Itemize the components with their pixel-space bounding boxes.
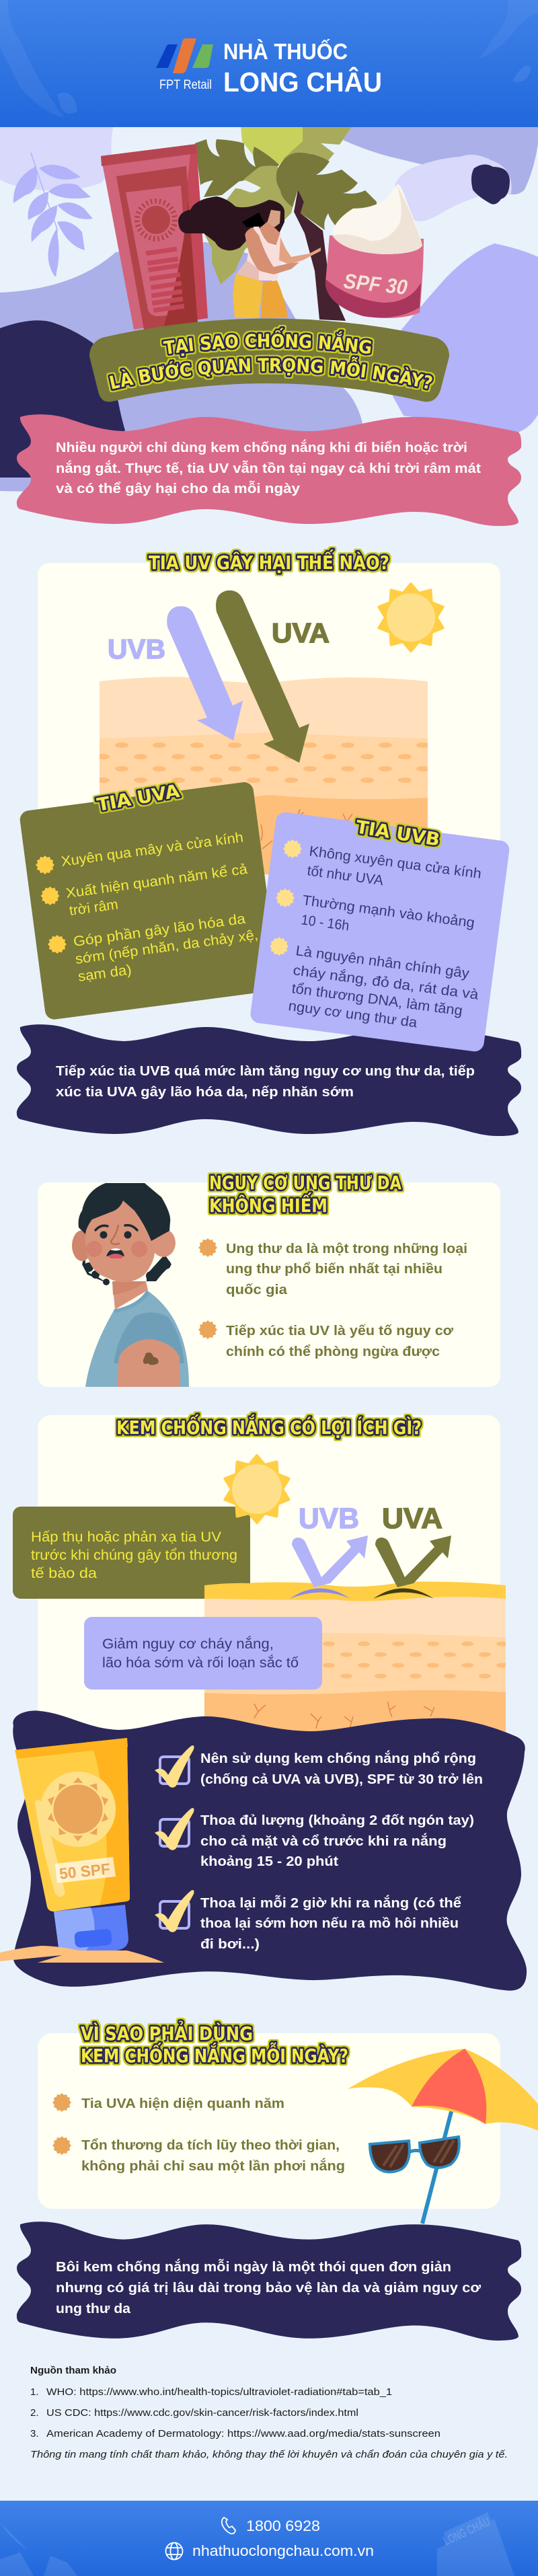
palm tree xyxy=(195,127,377,321)
footer band xyxy=(0,2501,538,2576)
navy blob: tips xyxy=(0,1710,527,1991)
pink intro banner: và có thể gây hại cho da mỗi ngày xyxy=(56,480,301,496)
references: Thông tin mang tính chất tham khảo, không thay thế lời khuyên và chẩn đoán của chuyên gia y tế. xyxy=(30,2449,508,2460)
checks xyxy=(155,1745,194,1932)
card: TIA UVB xyxy=(249,811,510,1053)
website: nhathuoclongchau.com.vn xyxy=(192,2542,374,2559)
bullets: risk: Tiếp xúc tia UV là yếu tố nguy cơ xyxy=(226,1324,454,1338)
skin layers xyxy=(96,677,430,874)
sunglasses xyxy=(370,2137,459,2172)
man illustration xyxy=(72,1183,189,1387)
tips text: khoảng 15 - 20 phút xyxy=(200,1854,338,1869)
leaf sprig xyxy=(13,153,93,277)
references: WHO: https://www.who.int/health-topics/ultraviolet-radiation#tab=tab_1 xyxy=(46,2386,392,2398)
UVA reflect: UVA xyxy=(382,1503,443,1535)
references: US CDC: https://www.cdc.gov/skin-cancer/risk-factors/index.html xyxy=(46,2407,358,2419)
label UVB: UVB xyxy=(108,634,165,665)
navy banner: UVB UVA: Tiếp xúc tia UVB quá mức làm tăng nguy cơ ung thư da, tiếp xyxy=(56,1064,475,1079)
UVB reflect: UVB xyxy=(299,1503,359,1535)
references: 2. xyxy=(30,2407,39,2419)
text: KHÔNG HIẾM xyxy=(209,1192,328,1217)
tips text: đi bơi...) xyxy=(200,1937,260,1952)
panel: why daily: Tổn thương da tích lũy theo thời gian, xyxy=(81,2138,340,2153)
card: TIA UVB: tổn thương DNA, làm tăng xyxy=(291,981,463,1019)
navy conclusion banner: nhưng có giá trị lâu dài trong bảo vệ làn da và giảm nguy cơ xyxy=(56,2281,482,2296)
heading: NGUY CƠ UNG THƯ DA xyxy=(209,1172,401,1194)
logo: LONG CHÂU xyxy=(223,67,382,98)
navy conclusion banner xyxy=(17,2222,521,2341)
panel: benefits xyxy=(38,1415,508,1749)
footer band: LONG CHÂU xyxy=(441,2514,492,2549)
panel: why daily xyxy=(38,2033,500,2209)
panel: why daily: không phải chỉ sau một lần phơi nắng xyxy=(81,2158,345,2174)
card: TIA UVB: Là nguyên nhân chính gây xyxy=(295,943,471,981)
UVB reflect xyxy=(290,1503,368,1599)
skin layers xyxy=(204,1582,506,1733)
pink intro banner xyxy=(17,414,521,526)
logo xyxy=(156,38,382,98)
tips text: Thoa lại mỗi 2 giờ khi ra nắng (có thể xyxy=(200,1895,461,1911)
heading: benefits: KEM CHỐNG NẮNG CÓ LỢI ÍCH GÌ? xyxy=(116,1413,422,1439)
card: TIA UVB: tốt như UVA xyxy=(306,863,384,888)
woman with long hair xyxy=(178,196,321,318)
phone number: 1800 6928 xyxy=(246,2517,320,2534)
olive box: trước khi chúng gây tổn thương xyxy=(31,1548,237,1563)
hero illustration xyxy=(0,127,538,492)
heading: why daily: KEM CHỐNG NẮNG MỖI NGÀY? xyxy=(81,2041,348,2067)
heading: why daily: VÌ SAO PHẢI DÙNG xyxy=(81,2020,253,2045)
UVA arrow xyxy=(216,591,309,763)
umbrella xyxy=(348,2049,538,2224)
references xyxy=(30,2365,508,2460)
lavender box xyxy=(84,1617,322,1690)
panel: UV harm xyxy=(38,563,500,874)
olive box: Hấp thụ hoặc phản xạ tia UV xyxy=(31,1529,221,1545)
hero illustration: LÀ BƯỚC QUAN TRỌNG MỖI NGÀY? xyxy=(106,354,436,393)
bullets: risk: chính có thể phòng ngừa được xyxy=(226,1344,440,1359)
references: 1. xyxy=(30,2386,39,2398)
phone icon xyxy=(222,2517,235,2534)
SPF 30 cream jar: SPF 30 xyxy=(342,269,408,299)
tips text: thoa lại sớm hơn nếu ra mồ hôi nhiều xyxy=(200,1916,459,1931)
header band xyxy=(0,0,538,127)
tube yellow: 50 SPF xyxy=(59,1860,111,1883)
references: 3. xyxy=(30,2428,39,2439)
navy banner: UVB UVA: xúc tia UVA gây lão hóa da, nếp nhăn sớm xyxy=(56,1085,354,1100)
card: TIA UVB: Không xuyên qua cửa kính xyxy=(308,843,482,882)
heading: why daily xyxy=(81,2020,348,2067)
panel: why daily: Tia UVA hiện diện quanh năm xyxy=(81,2096,284,2111)
sun xyxy=(379,584,443,651)
tips text xyxy=(200,1750,483,1952)
card: TIA UVB: cháy nắng, đỏ da, rát da và xyxy=(292,962,479,1003)
card: TIA UVA: sớm (nếp nhăn, da chảy xệ, xyxy=(75,927,259,967)
card: TIA UVA: sạm da) xyxy=(77,962,132,985)
references: American Academy of Dermatology: https://www.aad.org/media/stats-sunscreen xyxy=(46,2428,440,2439)
UVA reflect xyxy=(373,1503,451,1599)
pink intro banner: Nhiều người chỉ dùng kem chống nắng khi đi biển hoặc trời xyxy=(56,439,467,455)
pink intro banner: nắng gắt. Thực tế, tia UV vẫn tồn tại ngay cả khi trời râm mát xyxy=(56,460,481,476)
navy conclusion banner: Bôi kem chống nắng mỗi ngày là một thói quen đơn giản xyxy=(56,2259,451,2275)
navy conclusion banner: ung thư da xyxy=(56,2302,131,2316)
bullets: risk: Ung thư da là một trong những loại xyxy=(226,1242,467,1256)
card: TIA UVB: nguy cơ ung thư da xyxy=(287,998,418,1031)
logo: FPT Retail xyxy=(159,78,212,92)
card: TIA UVB: TIA UVB xyxy=(354,817,441,851)
tips text: Thoa đủ lượng (khoảng 2 đốt ngón tay) xyxy=(200,1813,474,1828)
SPF 30 cream jar xyxy=(325,184,424,318)
navy banner: UVB UVA xyxy=(17,1024,521,1136)
bullets: risk: quốc gia xyxy=(226,1283,288,1297)
sun xyxy=(225,1455,289,1523)
lavender box: lão hóa sớm và rối loạn sắc tố xyxy=(102,1655,299,1671)
globe icon xyxy=(165,2542,183,2560)
UVB arrow xyxy=(167,606,243,741)
card: TIA UVB: Thường mạnh vào khoảng xyxy=(301,893,475,931)
references: Nguồn tham khảo xyxy=(30,2365,116,2376)
label UVA: UVA xyxy=(272,617,330,648)
card: TIA UVA: Xuất hiện quanh năm kể cả xyxy=(65,862,249,901)
title ribbon xyxy=(89,319,449,402)
title text: TẠI SAO CHỐNG NẮNG xyxy=(160,325,374,359)
card: TIA UVA: Góp phần gây lão hóa da xyxy=(73,911,247,950)
tips text: cho cả mặt và cổ trước khi ra nắng xyxy=(200,1833,447,1849)
olive box xyxy=(13,1507,250,1599)
tube yellow xyxy=(15,1738,130,1954)
tips text: Nên sử dụng kem chống nắng phổ rộng xyxy=(200,1750,476,1766)
tips text: (chống cả UVA và UVB), SPF từ 30 trở lên xyxy=(200,1772,483,1787)
card: TIA UVA: Xuyên qua mây và cửa kính xyxy=(61,830,244,870)
card: TIA UVA: trời râm xyxy=(69,897,119,919)
card: TIA UVA xyxy=(19,781,280,1020)
lavender box: Giảm nguy cơ cháy nắng, xyxy=(102,1636,274,1652)
bullets: risk: ung thư phổ biến nhất tại nhiều xyxy=(226,1262,443,1277)
panel: skin cancer risk xyxy=(38,1172,500,1387)
sand xyxy=(0,1946,164,1963)
card: TIA UVB: 10 - 16h xyxy=(300,912,350,934)
olive box: tế bào da xyxy=(31,1566,97,1581)
heading: TIA UV: TIA UV GÂY HẠI THẾ NÀO? xyxy=(149,549,389,574)
sunscreen tube xyxy=(101,144,208,330)
bullets: risk xyxy=(198,1238,467,1359)
logo: NHÀ THUỐC xyxy=(223,38,348,64)
background blobs xyxy=(0,127,538,492)
card: TIA UVA: TIA UVA xyxy=(95,781,181,816)
